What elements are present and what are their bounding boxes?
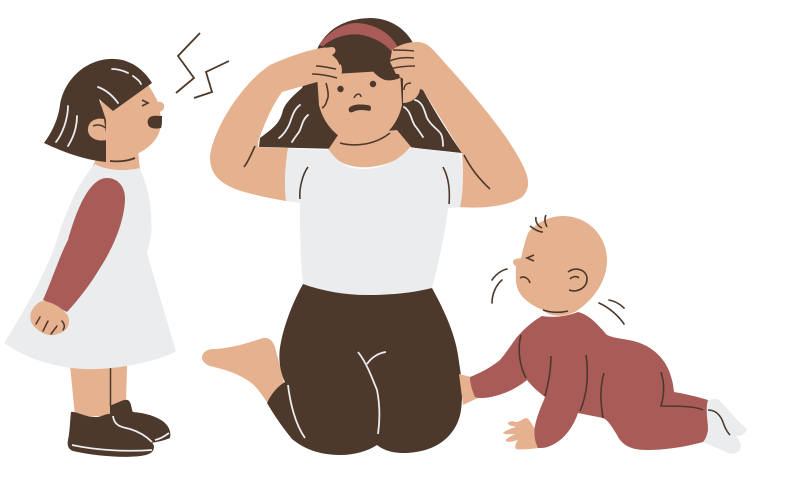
shoe highlights: [72, 416, 169, 451]
baby crying marks: [492, 269, 624, 324]
mother nose: [354, 94, 361, 98]
mother eye right: [370, 81, 376, 87]
baby hand on mother: [459, 374, 480, 405]
mother eye left: [337, 86, 344, 92]
girl open mouth: [148, 116, 162, 129]
mother headband: [319, 23, 397, 54]
girl face: [100, 85, 164, 158]
girl neck: [93, 150, 140, 178]
baby socks: [703, 399, 747, 454]
girl ear: [88, 119, 107, 141]
girl front leg: [70, 365, 110, 416]
girl dress: [4, 164, 176, 369]
figure: crying baby: [459, 215, 747, 454]
mother ear: [403, 76, 420, 103]
baby suit lines: [519, 335, 730, 435]
figure: shouting girl: [4, 59, 176, 457]
girl finger lines: [36, 317, 64, 334]
mother shirt: [285, 147, 463, 295]
girl hair highlights: [56, 69, 141, 146]
girl back shoe: [110, 400, 170, 443]
baby head: [513, 216, 607, 316]
mother neck: [328, 130, 412, 167]
mother right arm: [392, 42, 528, 208]
mother mouth: [349, 104, 371, 112]
girl hand: [30, 301, 69, 335]
mother facial and arm lines: [244, 83, 490, 204]
mother right hand: [390, 42, 420, 75]
girl leg line: [110, 368, 112, 406]
pants highlights: [288, 352, 386, 438]
mother face: [317, 70, 402, 144]
mother ear line: [404, 83, 411, 90]
figure: stressed mother: [202, 18, 528, 455]
mother left arm: [210, 47, 342, 201]
mother foot: [202, 338, 284, 402]
mother left hand: [290, 47, 340, 82]
mother back hair: [259, 18, 462, 153]
finger lines: [312, 50, 415, 78]
girl front shoe: [68, 412, 154, 457]
girl neck line: [110, 158, 135, 161]
baby face lines: [520, 215, 587, 312]
baby floor hand: [503, 418, 539, 449]
baby body suit: [470, 312, 708, 450]
mother front hair: [323, 34, 400, 80]
girl eye: [142, 100, 148, 106]
girl hair: [44, 59, 152, 162]
girl ear line: [93, 125, 105, 128]
mother pants: [267, 284, 462, 455]
girl back leg: [108, 365, 127, 404]
girl sleeve: [43, 178, 125, 312]
mother hair highlights: [279, 100, 443, 146]
shout lightning marks: [176, 33, 229, 98]
